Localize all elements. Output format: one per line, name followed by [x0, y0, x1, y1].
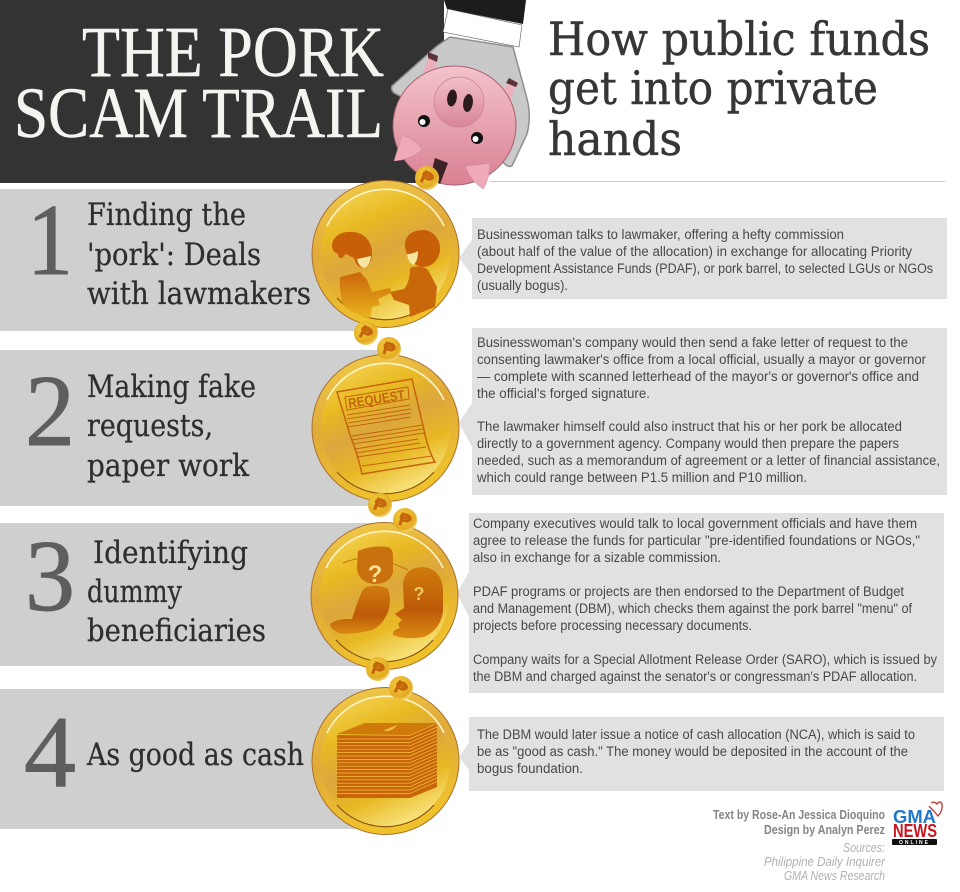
- coin 3: dummy beneficiaries: [311, 522, 458, 670]
- text block: step 2: the official's forged signature.: [477, 386, 650, 401]
- logo: GMA News Online: [892, 802, 942, 846]
- coin 2: request letter: [312, 354, 459, 502]
- text block: step 2: — complete with scanned letterhead of the mayor's or governor's office and: [477, 369, 919, 384]
- step 2 heading: Making fake: [87, 369, 256, 405]
- credits: Philippine Daily Inquirer: [764, 855, 886, 869]
- text block: step 3: agree to release the funds for particular "pre-identified foundations or NGOs,": [473, 533, 920, 548]
- step 1 heading: [27, 184, 311, 312]
- step 4 heading: 4: [24, 696, 76, 809]
- subtitle: hands: [548, 112, 682, 166]
- step 3 heading: [25, 520, 266, 649]
- coin 3: dummy beneficiaries: ?: [414, 584, 424, 604]
- step 1 heading: with lawmakers: [87, 276, 311, 312]
- small coin 7: ₱: [391, 676, 411, 700]
- step 2 heading: [25, 355, 256, 484]
- text block: step 4: [459, 717, 944, 791]
- text block: step 2: directly to a government agency. Company would then prepare the papers: [477, 436, 899, 451]
- text block: step 1: Businesswoman talks to lawmaker, offering a hefty commission: [477, 227, 844, 242]
- panel: step 4 band: [0, 689, 385, 829]
- subtitle: How public funds: [548, 12, 930, 66]
- text block: step 1: (usually bogus).: [477, 278, 568, 293]
- step 2 heading: paper work: [87, 448, 249, 484]
- subtitle: get into private: [548, 61, 878, 115]
- credits: GMA News Research: [784, 869, 885, 883]
- title banner: SCAM TRAIL: [14, 73, 383, 153]
- subtitle: [548, 12, 930, 166]
- small coin 5: [393, 508, 417, 532]
- title banner: [0, 0, 444, 183]
- text block: step 2: needed, such as a memorandum of agreement or a letter of financial assistance,: [477, 453, 940, 468]
- logo: GMA News Online: NEWS: [893, 821, 937, 841]
- small coin 6: ₱: [369, 658, 387, 680]
- text block: step 3: also in exchange for a sizable commission.: [473, 550, 721, 565]
- credits: Sources:: [843, 841, 885, 855]
- text block: step 3: the DBM and charged against the senator's or congressman's PDAF allocation.: [473, 669, 917, 684]
- logo: GMA News Online: GMA: [893, 807, 936, 827]
- text block: step 1: (about half of the value of the allocation) in exchange for allocating Priority: [477, 244, 912, 259]
- small coin 1: ₱: [417, 166, 437, 190]
- logo: GMA News Online: ONLINE: [899, 840, 930, 846]
- icon: hand holding piggy bank: [392, 0, 529, 189]
- small coin 3: ₱: [381, 338, 397, 360]
- coin 4: stack of paper: [312, 688, 459, 834]
- panel: step 2 band: [0, 350, 380, 506]
- step 3 heading: dummy: [87, 574, 182, 610]
- text block: step 3: Company executives would talk to local government officials and have them: [473, 516, 917, 531]
- coin 2: request letter: REQUEST: [347, 387, 406, 411]
- step 1 heading: 'pork': Deals: [87, 237, 261, 273]
- step 2 heading: 2: [25, 355, 75, 468]
- text block: step 3: and Management (DBM), which checks them against the pork barrel "menu" of: [473, 601, 912, 616]
- text block: step 3: projects before processing necessary documents.: [473, 618, 752, 633]
- small coin 2: ₱: [356, 321, 376, 345]
- text block: step 2: consenting lawmaker's office from a local official, usually a mayor or governor: [477, 352, 926, 367]
- text block: step 3: [457, 513, 944, 693]
- text block: step 4: The DBM would later issue a notice of cash allocation (NCA), which is said to: [477, 727, 915, 742]
- panel: step 1 band: [0, 189, 358, 331]
- text block: step 4: bogus foundation.: [477, 761, 583, 776]
- small coin 4: ₱: [371, 494, 389, 516]
- step 3 heading: Identifying: [93, 535, 248, 571]
- step 4 heading: As good as cash: [86, 737, 304, 773]
- step 4 heading: [24, 696, 304, 809]
- credits: [713, 808, 886, 883]
- text block: step 3: PDAF programs or projects are then endorsed to the Department of Budget: [473, 584, 904, 599]
- step 1 heading: 1: [27, 184, 73, 297]
- credits: Design by Analyn Perez: [764, 823, 885, 837]
- text block: step 2: Businesswoman's company would then send a fake letter of request to the: [477, 335, 908, 350]
- text block: step 1: Development Assistance Funds (PDAF), or pork barrel, to selected LGUs or NGOs: [477, 261, 933, 276]
- coin 1: handshake: [312, 180, 459, 328]
- step 1 heading: Finding the: [87, 197, 246, 233]
- small coin 3: [377, 337, 401, 361]
- credits: Text by Rose-An Jessica Dioquino: [713, 808, 885, 822]
- text block: step 4: be as "good as cash." The money would be deposited in the account of the: [477, 744, 908, 759]
- title banner: THE PORK: [82, 12, 384, 92]
- text block: step 2: [459, 328, 947, 495]
- panel: step 3 band: [0, 523, 375, 666]
- step 3 heading: 3: [25, 520, 75, 633]
- text block: step 2: The lawmaker himself could also instruct that his or her pork be allocated: [477, 419, 902, 434]
- coin 3: dummy beneficiaries: ?: [368, 561, 382, 588]
- text block: step 3: Company waits for a Special Allotment Release Order (SARO), which is issued by: [473, 652, 937, 667]
- small coin 5: ₱: [397, 509, 413, 531]
- step 3 heading: beneficiaries: [87, 613, 266, 649]
- step 2 heading: requests,: [87, 408, 213, 444]
- text block: step 1: [459, 218, 947, 299]
- text block: step 2: which could range between P1.5 million and P10 million.: [476, 470, 807, 485]
